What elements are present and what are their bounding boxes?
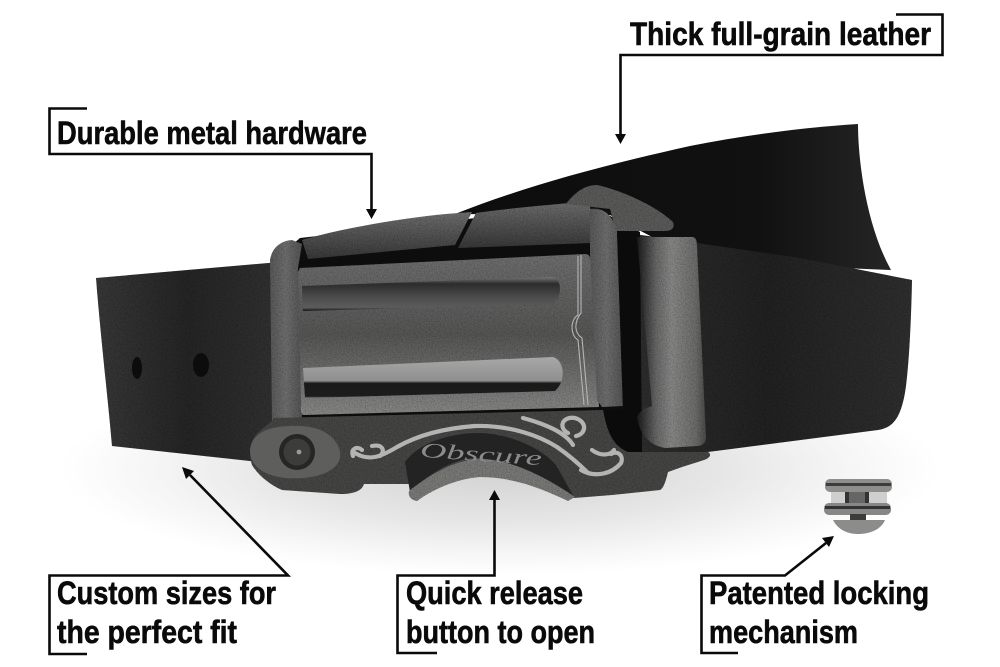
left frame post (270, 240, 302, 420)
locking mechanism stud (824, 479, 892, 534)
buckle shadow (272, 205, 640, 452)
release button (409, 459, 575, 501)
dark gap (605, 231, 642, 452)
label: Custom sizes for (57, 575, 276, 611)
stud middle plate (824, 503, 891, 515)
panel engraving (572, 255, 588, 405)
stud base (833, 514, 885, 534)
label (709, 575, 929, 650)
centre panel (298, 254, 599, 415)
callout: thick full-grain leather (615, 14, 942, 144)
callout: custom sizes (50, 467, 288, 654)
label (406, 575, 595, 650)
left leather strap (96, 262, 280, 466)
callout: quick release (398, 490, 595, 653)
back strap of leather (455, 124, 891, 270)
grip circle (250, 426, 340, 478)
bracket and arrow (50, 467, 288, 654)
bracket and arrow (398, 490, 500, 653)
label: Thick full-grain leather (630, 16, 931, 52)
bracket and arrow (50, 108, 377, 219)
upper flute (302, 277, 560, 311)
label (57, 575, 276, 650)
top left slide (302, 212, 472, 259)
top right slide (458, 201, 591, 248)
bracket and arrow (702, 536, 834, 653)
bracket and arrow (615, 14, 942, 144)
hammer top (566, 185, 674, 231)
label: Durable metal hardware (57, 115, 367, 151)
scrollwork engraving (352, 418, 622, 474)
stud neck (831, 491, 887, 504)
label: mechanism (709, 614, 858, 650)
right leather strap (620, 232, 912, 453)
metal buckle (250, 185, 710, 501)
label: button to open (406, 614, 595, 650)
belt holes (132, 353, 209, 379)
stud top plate (825, 479, 892, 492)
label: Quick release (406, 575, 583, 611)
vertical bar (590, 209, 623, 407)
floor reflection (60, 430, 940, 580)
arched logo plate (405, 433, 574, 497)
logo text: Obscure (419, 438, 543, 470)
label: Patented locking (709, 575, 929, 611)
leather belt (96, 124, 912, 466)
bottom frame with handle (250, 410, 710, 498)
belt keeper (637, 237, 706, 448)
label: the perfect fit (57, 614, 237, 650)
callout: durable metal hardware (50, 108, 377, 219)
lower flute (303, 357, 563, 398)
callout: patented locking mechanism (702, 536, 929, 653)
